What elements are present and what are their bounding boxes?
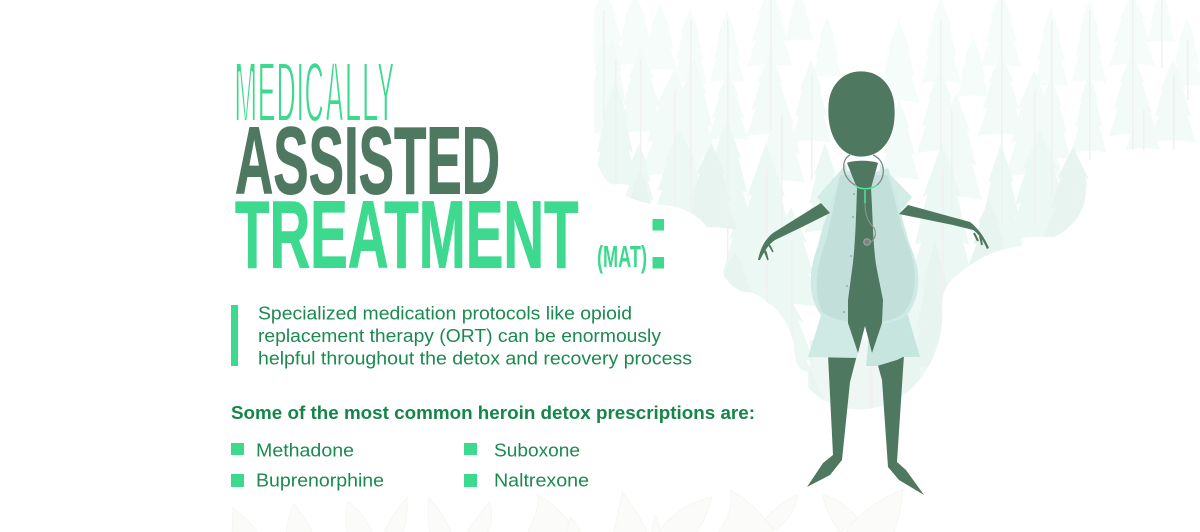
list heading: Some of the most common heroin detox prescriptions are: — [231, 402, 755, 423]
title: (MAT) abbreviation: (MAT) — [597, 239, 647, 274]
title: Medically: MEDICALLY — [234, 42, 395, 143]
bottom leaves decoration — [232, 490, 903, 532]
list item: Naltrexone: Naltrexone — [494, 470, 589, 490]
coat: back and sleeves — [808, 164, 920, 366]
intro text block: replacement therapy (ORT) can be enormously — [258, 325, 662, 346]
head — [828, 71, 895, 157]
list item: Suboxone: Suboxone — [494, 440, 580, 460]
figure: doctor silhouette in lab coat — [758, 71, 989, 495]
prescription list — [231, 440, 589, 490]
arms — [758, 203, 989, 260]
tree trunks — [603, 0, 1188, 258]
torso — [847, 161, 883, 353]
trees: darkest accents — [626, 143, 1102, 415]
stethoscope — [844, 155, 883, 245]
intro text block: Specialized medication protocols like opioid — [258, 302, 632, 324]
accent bar beside intro — [231, 305, 238, 366]
trees: front layer — [597, 106, 1058, 390]
background: forest of pine trees — [581, 0, 1200, 415]
trees: middle layer — [594, 60, 1196, 200]
legs — [807, 355, 924, 495]
intro text block: helpful throughout the detox and recovery process — [258, 348, 692, 368]
leaf row — [232, 490, 903, 532]
list item: Buprenorphine: Buprenorphine — [256, 470, 384, 490]
list item: Methadone: Methadone — [256, 440, 354, 460]
intro text block — [258, 302, 692, 368]
title: colon made of two squares — [652, 219, 664, 268]
trees: lightest back layer — [581, 0, 1200, 103]
coat buttons — [843, 193, 855, 313]
